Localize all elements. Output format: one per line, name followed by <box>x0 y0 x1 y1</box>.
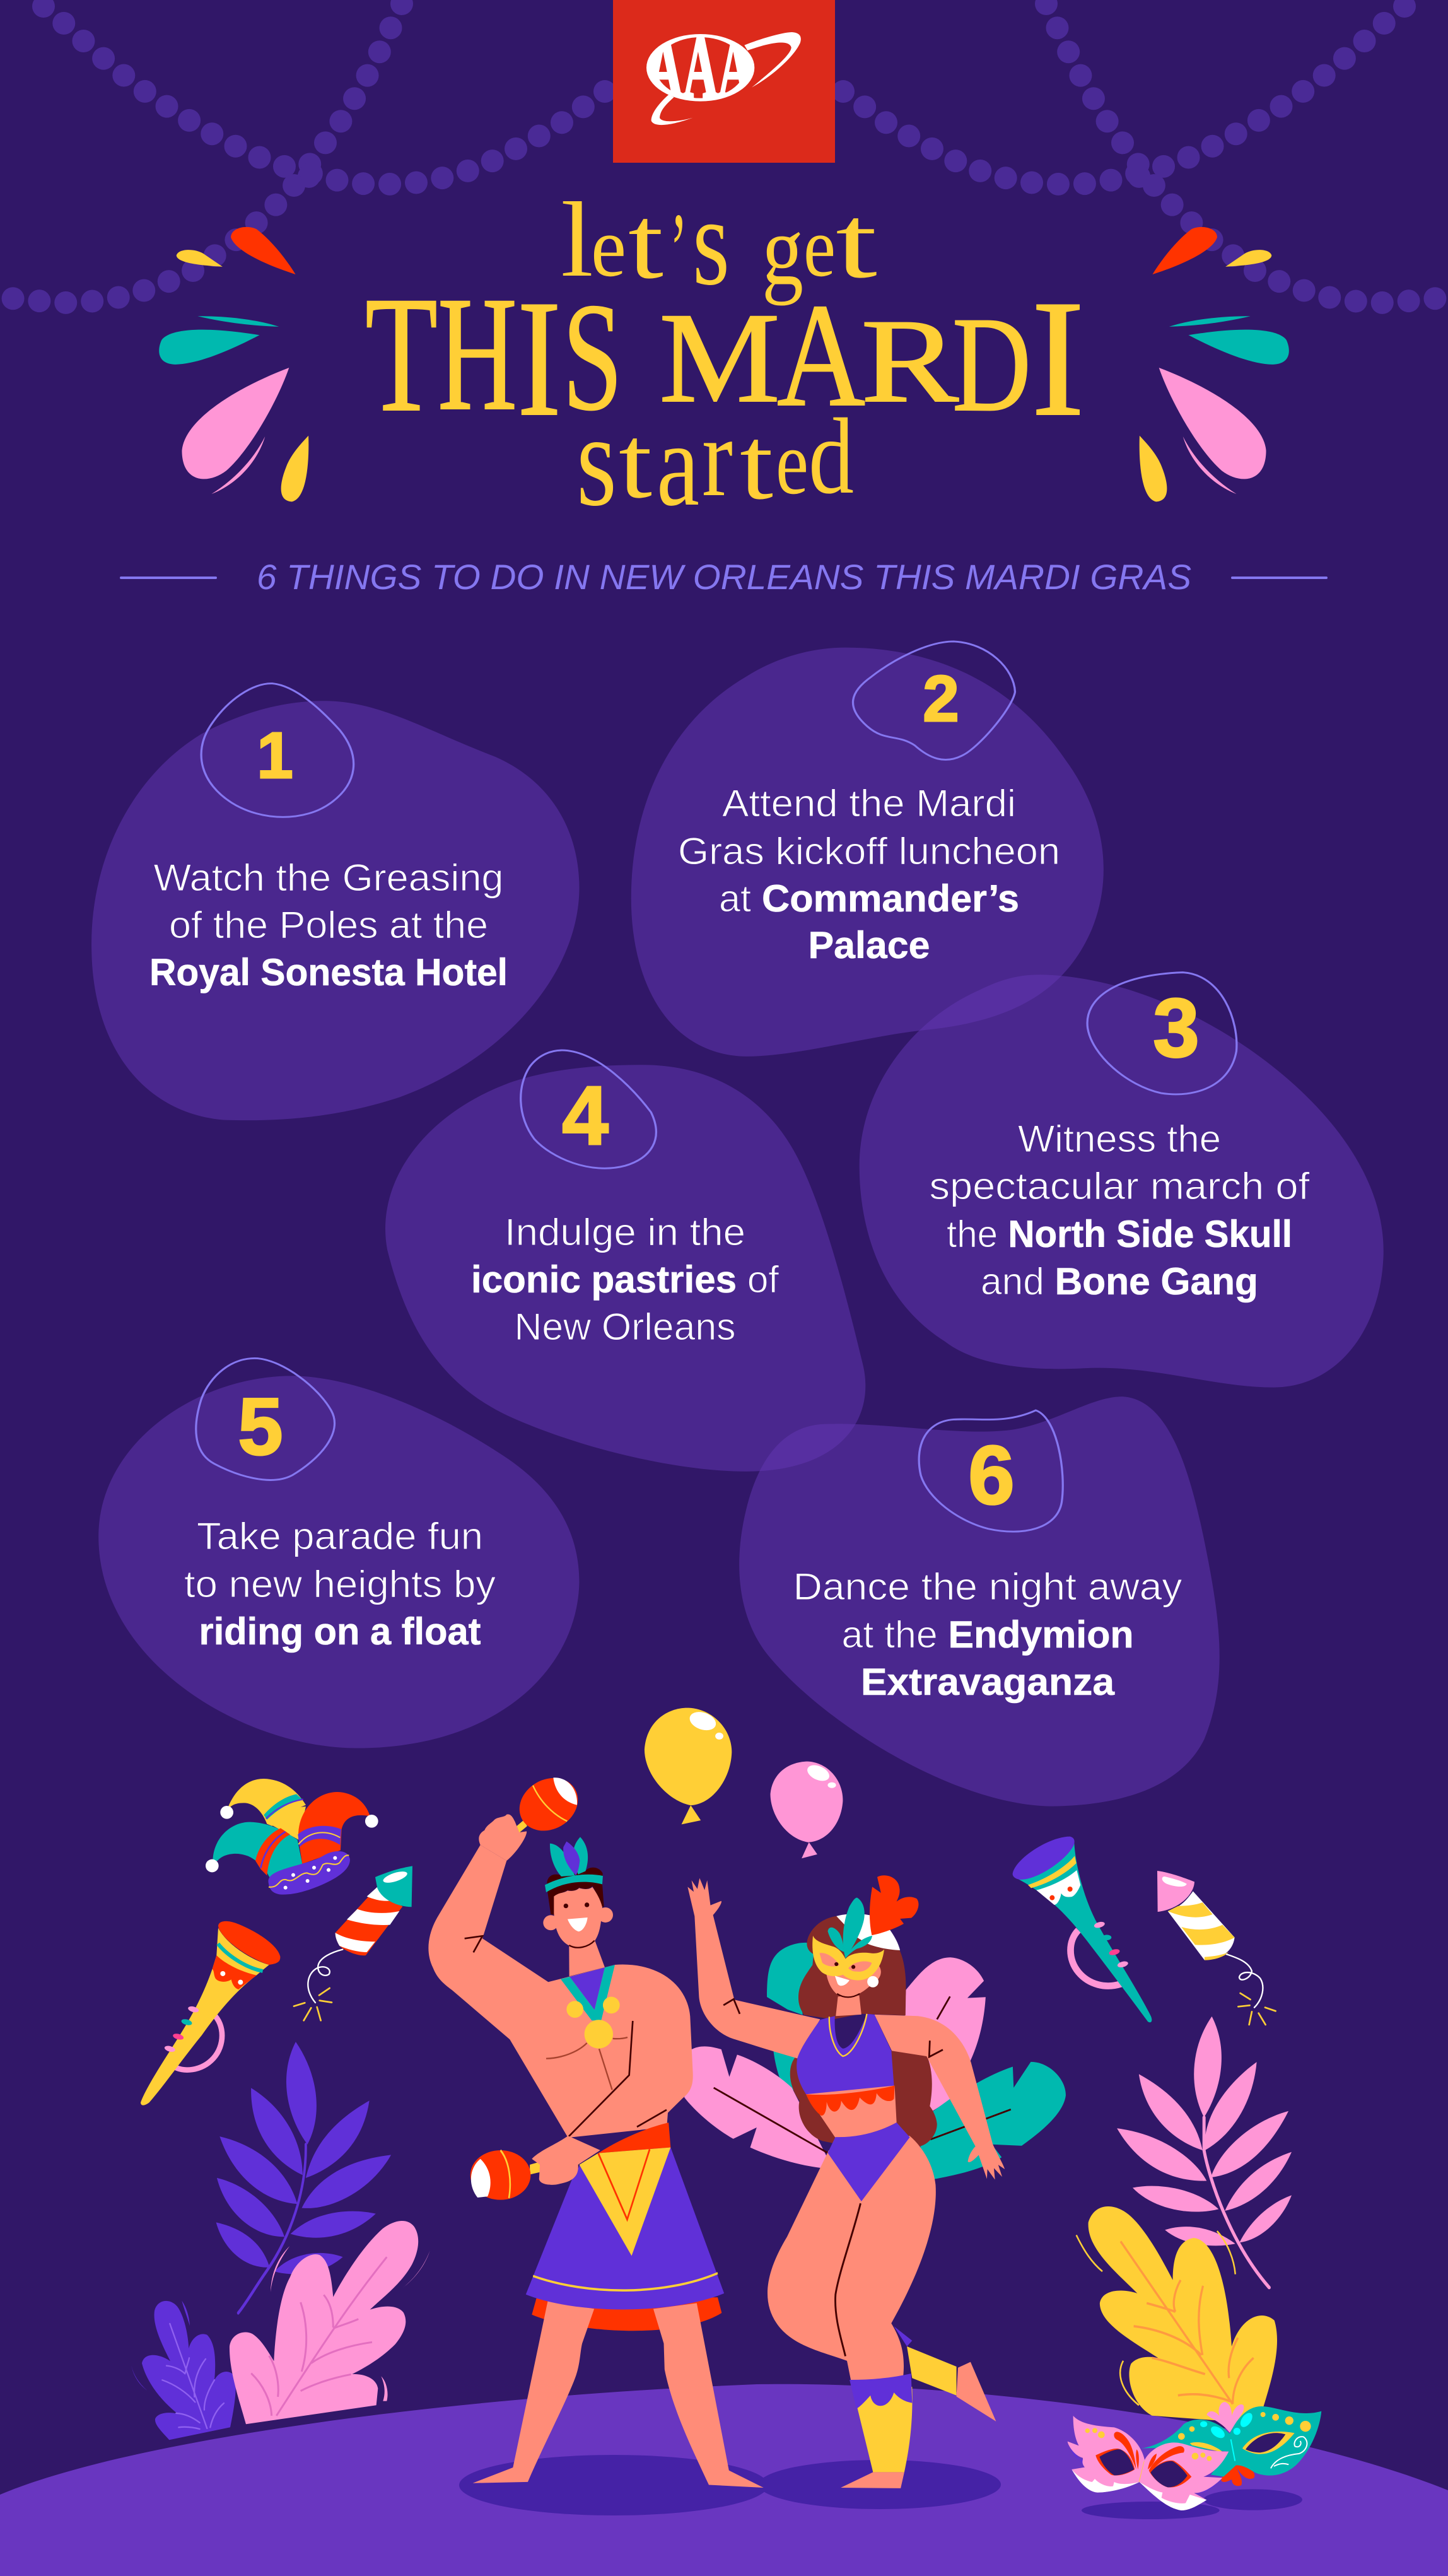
step 3 text: spectacular march of <box>930 1165 1310 1207</box>
right splash decoration <box>1140 227 1289 501</box>
plant: pink leaves left <box>230 2221 430 2424</box>
head with mask and feathers <box>812 1875 918 1997</box>
number 2: 2 <box>923 662 959 735</box>
title line: let's get: ’ <box>670 191 687 310</box>
step 3 text <box>930 1118 1310 1303</box>
subtitle: 6 THINGS TO DO IN NEW ORLEANS THIS MARDI GRAS <box>257 557 1191 597</box>
icon: yellow rocket <box>1157 1871 1276 2025</box>
step 6 text: at the Endymion <box>841 1613 1134 1656</box>
step 1 text: Watch the Greasing <box>154 857 503 899</box>
title line: started: r <box>702 394 733 520</box>
icon: yellow party horn <box>141 1921 280 2105</box>
title line: started: t <box>740 406 773 521</box>
title line: let's get: t <box>628 185 663 300</box>
step 5 text <box>184 1515 496 1653</box>
title line: THIS MARDI: R <box>861 295 959 428</box>
mask shadows <box>1082 2489 1302 2519</box>
icon: striped rocket <box>294 1866 412 2020</box>
pink mask left <box>1068 2416 1145 2493</box>
number 4: 4 <box>562 1069 609 1162</box>
title line: started: t <box>619 404 652 520</box>
icon: jester hat <box>206 1779 378 1895</box>
blob 4 <box>385 1050 865 1472</box>
title line: let's get: l <box>561 180 593 299</box>
step 4 text <box>471 1211 779 1348</box>
step 3 text: Witness the <box>1018 1118 1221 1160</box>
title line: started: e <box>776 413 809 513</box>
carnival masks <box>1068 2402 1321 2519</box>
title line: THIS MARDI: S <box>563 271 622 442</box>
number 6: 6 <box>968 1429 1015 1521</box>
number 5: 5 <box>238 1382 283 1472</box>
step 3 text: the North Side Skull <box>947 1213 1292 1255</box>
title line: started: a <box>657 399 699 531</box>
icon: pink balloon <box>771 1762 843 1858</box>
plant: pink branch right <box>1117 2017 1292 2288</box>
step 4 text: Indulge in the <box>505 1211 745 1253</box>
legs and skirt <box>473 2147 764 2488</box>
plant: small purple leaves <box>131 2301 236 2440</box>
title line: started: d <box>809 397 854 517</box>
step 6 text <box>793 1566 1182 1703</box>
ground <box>0 2384 1448 2576</box>
hair <box>790 1916 937 2146</box>
step 6 text: Dance the night away <box>793 1566 1182 1608</box>
title <box>365 172 1085 534</box>
title line: THIS MARDI: H <box>438 263 517 445</box>
step 2 text <box>678 782 1060 966</box>
blob 1 <box>91 684 580 1120</box>
AAA logo: AAA <box>648 18 753 117</box>
step 2 text: Gras kickoff luncheon <box>678 830 1060 872</box>
title line: let's get: e <box>591 201 626 295</box>
step 2 text: at Commander’s <box>719 877 1019 920</box>
title line: THIS MARDI: A <box>777 273 865 437</box>
bead strings <box>11 4 1437 303</box>
title line: THIS MARDI: I <box>517 266 561 451</box>
belt and yellow triangle <box>580 2122 670 2256</box>
AAA logo <box>613 0 835 163</box>
title line: let's get: t <box>836 184 877 300</box>
step 5 text: to new heights by <box>184 1563 496 1605</box>
blob 6 <box>739 1396 1220 1806</box>
number 3: 3 <box>1153 981 1200 1074</box>
blob 5 <box>98 1358 579 1748</box>
pink mask right <box>1140 2442 1229 2510</box>
step 2 text: Attend the Mardi <box>722 782 1016 824</box>
left splash decoration <box>159 227 308 501</box>
step 1 text: of the Poles at the <box>169 904 488 946</box>
tropical leaves behind the woman <box>684 1943 1066 2180</box>
step 6 text: Extravaganza <box>861 1661 1115 1703</box>
icon: teal party horn <box>1013 1837 1152 2022</box>
woman dancer <box>684 1875 1066 2488</box>
man dancer <box>428 1767 764 2488</box>
step 4 text: New Orleans <box>515 1306 735 1348</box>
title line: started: s <box>576 387 617 534</box>
shadows under dancers <box>459 2455 1001 2515</box>
icon: yellow balloon <box>645 1708 732 1824</box>
lower maraca and hand <box>470 2136 600 2200</box>
title line: THIS MARDI: D <box>952 289 1031 440</box>
torso, arms and bikini <box>687 1878 1005 2201</box>
title line: let's get: e <box>803 201 836 295</box>
step 3 text: and Bone Gang <box>981 1260 1258 1303</box>
step 5 text: riding on a float <box>199 1610 481 1653</box>
title line: THIS MARDI: M <box>659 286 780 430</box>
plant: yellow leaves right <box>1077 2206 1277 2421</box>
title line: THIS MARDI: T <box>365 262 438 446</box>
title line: let's get: g <box>762 194 803 306</box>
blob 3 <box>860 973 1384 1388</box>
torso, raised arm and head <box>428 1767 693 2138</box>
number 1: 1 <box>257 719 293 792</box>
panel: six numbered blobs <box>91 641 1384 1806</box>
step 2 text: Palace <box>809 924 930 966</box>
step 1 text <box>149 857 508 993</box>
legs <box>768 2136 996 2488</box>
plant: purple branch <box>216 2042 391 2313</box>
title line: let's get: s <box>692 172 730 312</box>
step 1 text: Royal Sonesta Hotel <box>149 951 508 993</box>
step 5 text: Take parade fun <box>197 1515 483 1557</box>
blob 2 <box>631 641 1104 1057</box>
title line: THIS MARDI: I <box>1031 266 1085 451</box>
step 4 text: iconic pastries of <box>471 1258 779 1301</box>
teal mask <box>1141 2402 1321 2486</box>
